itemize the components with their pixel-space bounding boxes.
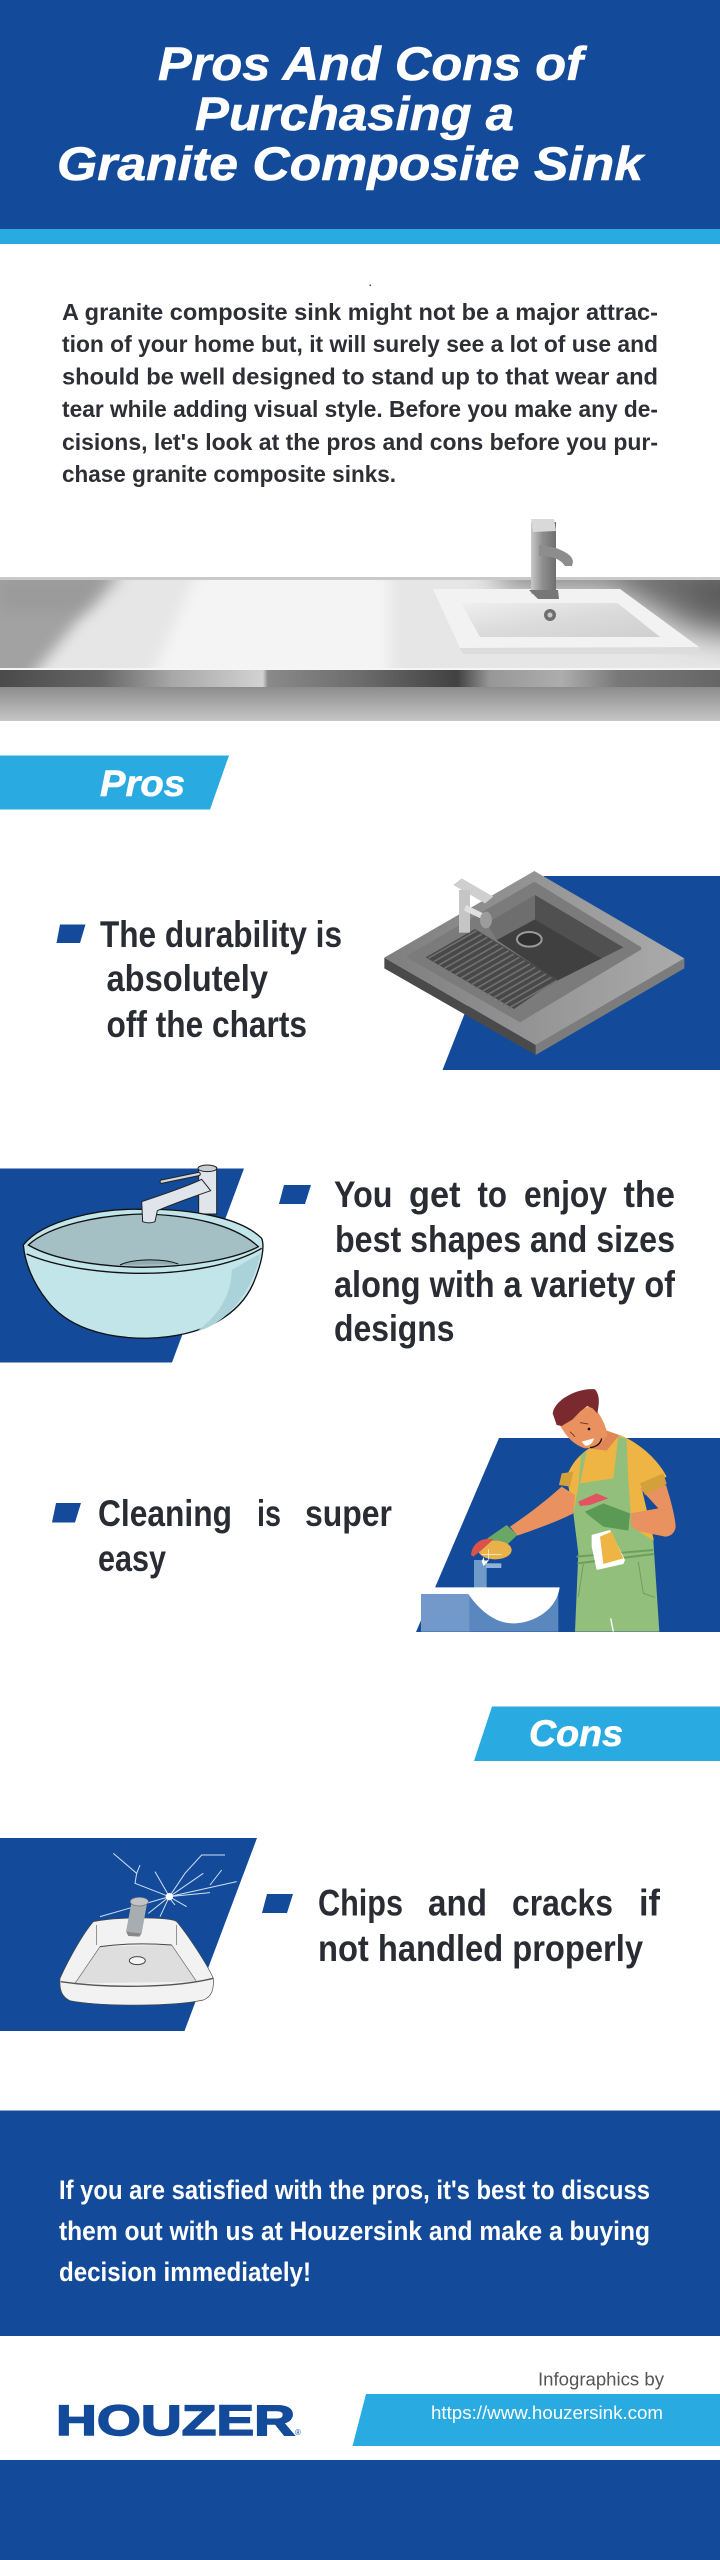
text: cleaning: super bbox=[305, 1493, 392, 1534]
title: Purchasing a bbox=[195, 87, 514, 140]
blue backing shape bbox=[0, 1838, 257, 2031]
text: chips and cracks: not handled properly bbox=[318, 1928, 643, 1969]
text: shapes and sizes: You bbox=[334, 1174, 392, 1215]
icon: man cleaning a faucet bbox=[421, 1389, 676, 1632]
text: chips and cracks: Chips bbox=[318, 1882, 403, 1924]
bullet bbox=[56, 924, 86, 943]
intro paragraph: tear while adding visual style. Before you make any de- bbox=[62, 396, 658, 422]
blue backing shape bbox=[0, 1168, 244, 1362]
blue backing shape bbox=[416, 1438, 720, 1632]
credit: infographics by: Infographics by bbox=[538, 2370, 664, 2390]
text: durability bbox=[100, 914, 342, 1045]
icon: vessel bowl sink bbox=[23, 1165, 263, 1338]
footer band bbox=[0, 2460, 720, 2560]
bullet bbox=[52, 1503, 81, 1522]
website link bar bbox=[352, 2394, 720, 2446]
closing call to action panel: decision immediately! bbox=[59, 2257, 311, 2287]
panel: shapes and sizes bbox=[0, 1165, 676, 1362]
text: cleaning: Cleaning bbox=[98, 1493, 232, 1534]
blue backing shape bbox=[442, 876, 720, 1070]
title: Granite Composite Sink bbox=[57, 137, 646, 190]
text: chips and cracks: cracks bbox=[512, 1882, 613, 1924]
logo: Houzer: ® bbox=[295, 2428, 301, 2437]
website link bar: https://www.houzersink.com bbox=[431, 2403, 663, 2423]
icon: cracked sink bbox=[60, 1853, 237, 2005]
icon: isometric granite sink bbox=[384, 871, 684, 1055]
bullet bbox=[279, 1185, 311, 1204]
text: shapes and sizes: enjoy bbox=[524, 1174, 607, 1215]
faucet bbox=[529, 519, 573, 599]
text: shapes and sizes bbox=[334, 1174, 676, 1349]
cons banner bbox=[474, 1706, 720, 1761]
intro paragraph: A granite composite sink might not be a major attrac- bbox=[62, 299, 658, 325]
text: cleaning bbox=[98, 1493, 392, 1579]
closing call to action panel: If you are satisfied with the pros, it's best to discuss bbox=[59, 2175, 650, 2205]
text: cleaning: easy bbox=[98, 1538, 166, 1579]
text: chips and cracks: and bbox=[428, 1882, 487, 1924]
text: shapes and sizes: best shapes and sizes bbox=[335, 1219, 675, 1260]
text: shapes and sizes: along with a variety of bbox=[334, 1264, 676, 1305]
panel: durability bbox=[56, 871, 720, 1070]
text: chips and cracks: if bbox=[639, 1882, 661, 1924]
text: durability: The durability is bbox=[100, 914, 342, 955]
header panel bbox=[0, 0, 720, 244]
text: shapes and sizes: to bbox=[478, 1174, 507, 1215]
text: durability: off the charts bbox=[106, 1004, 307, 1045]
intro paragraph bbox=[62, 299, 658, 487]
cons banner: Cons bbox=[529, 1713, 623, 1754]
text: durability: absolutely bbox=[106, 958, 268, 999]
panel: cleaning bbox=[52, 1389, 720, 1632]
title bbox=[57, 37, 646, 190]
closing call to action panel bbox=[0, 2110, 720, 2336]
title: Pros And Cons of bbox=[158, 37, 588, 90]
bullet bbox=[262, 1894, 293, 1913]
intro paragraph: tion of your home but, it will surely see a lot of use and bbox=[62, 331, 658, 357]
panel: chips and cracks bbox=[0, 1838, 661, 2031]
sink basin bbox=[433, 589, 699, 654]
closing call to action panel: them out with us at Houzersink and make a buying bbox=[59, 2216, 650, 2246]
intro paragraph: chase granite composite sinks. bbox=[62, 461, 396, 487]
text: shapes and sizes: get bbox=[409, 1174, 460, 1215]
pros banner: Pros bbox=[100, 763, 185, 804]
pros banner bbox=[0, 756, 229, 810]
intro paragraph: should be well designed to stand up to that wear and bbox=[62, 364, 658, 390]
text: shapes and sizes: designs bbox=[334, 1308, 454, 1349]
logo: Houzer: HOUZER bbox=[56, 2398, 295, 2445]
text: shapes and sizes: the bbox=[624, 1174, 675, 1215]
intro paragraph: cisions, let's look at the pros and cons before you pur- bbox=[62, 429, 658, 455]
text: cleaning: is bbox=[257, 1493, 281, 1534]
countertop with sink illustration bbox=[0, 519, 720, 721]
text: chips and cracks bbox=[318, 1882, 661, 1969]
